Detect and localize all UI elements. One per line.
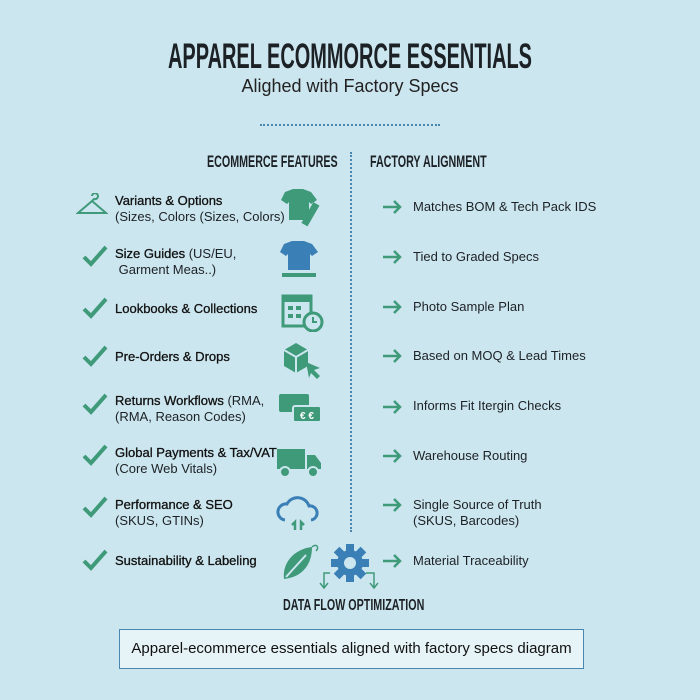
check 6 bbox=[82, 444, 108, 466]
feature: performance bbox=[115, 497, 233, 528]
icon: gear with arrows bbox=[320, 544, 378, 590]
arrows and factory texts: Warehouse Routing bbox=[413, 448, 527, 463]
check 5 bbox=[82, 394, 108, 415]
feature: variants: (Sizes, Colors (Sizes, Colors) bbox=[115, 209, 285, 224]
feature: variants bbox=[114, 193, 285, 224]
caption box: Apparel-ecommerce essentials aligned with factory specs diagram bbox=[131, 640, 572, 657]
feature: lookbooks: Lookbooks & Collections bbox=[115, 301, 257, 316]
arrows and factory texts: Based on MOQ & Lead Times bbox=[413, 348, 586, 363]
arrows and factory texts: Material Traceability bbox=[413, 553, 529, 568]
arrows and factory texts: Photo Sample Plan bbox=[413, 299, 524, 314]
feature: payments bbox=[115, 445, 277, 476]
feature: returns: Returns Workflows (RMA, bbox=[115, 393, 264, 408]
feature: variants: Variants & Options bbox=[115, 193, 222, 208]
feature: performance: (SKUS, GTINs) bbox=[115, 513, 204, 528]
check 3 bbox=[82, 298, 108, 319]
feature: sustainability: Sustainability & Labeling bbox=[115, 553, 257, 568]
icon: tshirt ruler bbox=[281, 189, 320, 226]
caption box bbox=[119, 629, 584, 669]
feature: performance: Performance & SEO bbox=[115, 497, 233, 512]
check 7 bbox=[82, 496, 108, 518]
icon: calendar clock bbox=[282, 294, 324, 332]
feature: preorders: Pre-Orders & Drops bbox=[115, 349, 230, 364]
feature: size guides bbox=[115, 246, 236, 277]
arrows and factory texts: Matches BOM & Tech Pack IDS bbox=[413, 199, 596, 214]
icon: card money: € € bbox=[300, 411, 314, 422]
check 2 bbox=[82, 246, 108, 267]
feature: returns: (RMA, Reason Codes) bbox=[115, 409, 246, 424]
data flow label: DATA FLOW OPTIMIZATION bbox=[283, 597, 424, 614]
header: factory alignment: FACTORY ALIGNMENT bbox=[370, 152, 487, 171]
feature: payments: (Core Web Vitals) bbox=[115, 461, 217, 476]
feature: size guides: Garment Meas..) bbox=[119, 262, 216, 277]
arrows and factory texts: Informs Fit Itergin Checks bbox=[413, 398, 561, 413]
icon: hanger bbox=[76, 193, 108, 214]
icon: leaf tag bbox=[284, 544, 318, 579]
feature: returns bbox=[115, 393, 264, 424]
arrows and factory texts: Tied to Graded Specs bbox=[413, 249, 539, 264]
arrows and factory texts: Single Source of Truth bbox=[413, 497, 542, 512]
feature: size guides: Size Guides (US/EU, bbox=[115, 246, 236, 261]
subtitle: Alighed with Factory Specs bbox=[241, 76, 459, 96]
header: ecommerce features: ECOMMERCE FEATURES bbox=[207, 152, 338, 171]
feature: payments: Global Payments & Tax/VAT bbox=[115, 445, 277, 460]
icon: card money bbox=[279, 394, 320, 422]
icon: blue tshirt bbox=[280, 241, 318, 277]
icon: box cursor bbox=[284, 343, 320, 379]
check 8 bbox=[82, 550, 108, 571]
check 4 bbox=[82, 346, 108, 367]
title: APPAREL ECOMMORCE ESSENTIALS bbox=[168, 37, 532, 76]
icon: truck bbox=[277, 449, 321, 476]
arrows and factory texts: (SKUS, Barcodes) bbox=[413, 513, 519, 528]
icon: cloud gauge bbox=[276, 496, 319, 530]
